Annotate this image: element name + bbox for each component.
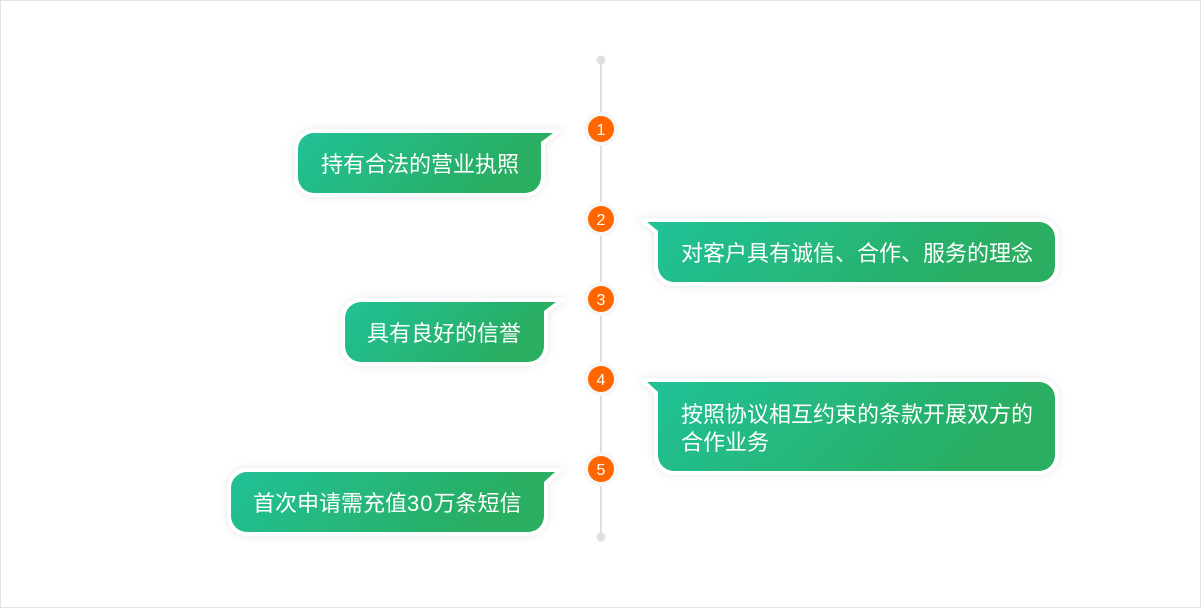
step 5 number marker: 5 [597, 462, 606, 479]
callout 5: 首次申请需充值30万条短信 [253, 491, 522, 516]
step 3 number marker: 3 [597, 292, 606, 309]
step 4 number marker: 4 [597, 372, 606, 389]
step 4 number marker [584, 362, 618, 396]
callout 4: 合作业务 [681, 430, 769, 455]
callout 1 [298, 133, 553, 193]
callout 4 [647, 382, 1055, 471]
step 2 number marker: 2 [597, 212, 606, 229]
callout 3: 具有良好的信誉 [367, 321, 521, 346]
step 1 number marker: 1 [597, 122, 606, 139]
callout 4: 按照协议相互约束的条款开展双方的 [681, 402, 1033, 427]
step 1 number marker [584, 112, 618, 146]
callout 1: 持有合法的营业执照 [321, 152, 519, 177]
step 5 number marker [584, 452, 618, 486]
step 2 number marker [584, 202, 618, 236]
callout 5 [231, 472, 555, 532]
callout 2: 对客户具有诚信、合作、服务的理念 [681, 241, 1033, 266]
step 3 number marker [584, 282, 618, 316]
callout 3 [345, 302, 556, 362]
callout 2 [647, 222, 1055, 282]
timeline axis [596, 56, 606, 542]
